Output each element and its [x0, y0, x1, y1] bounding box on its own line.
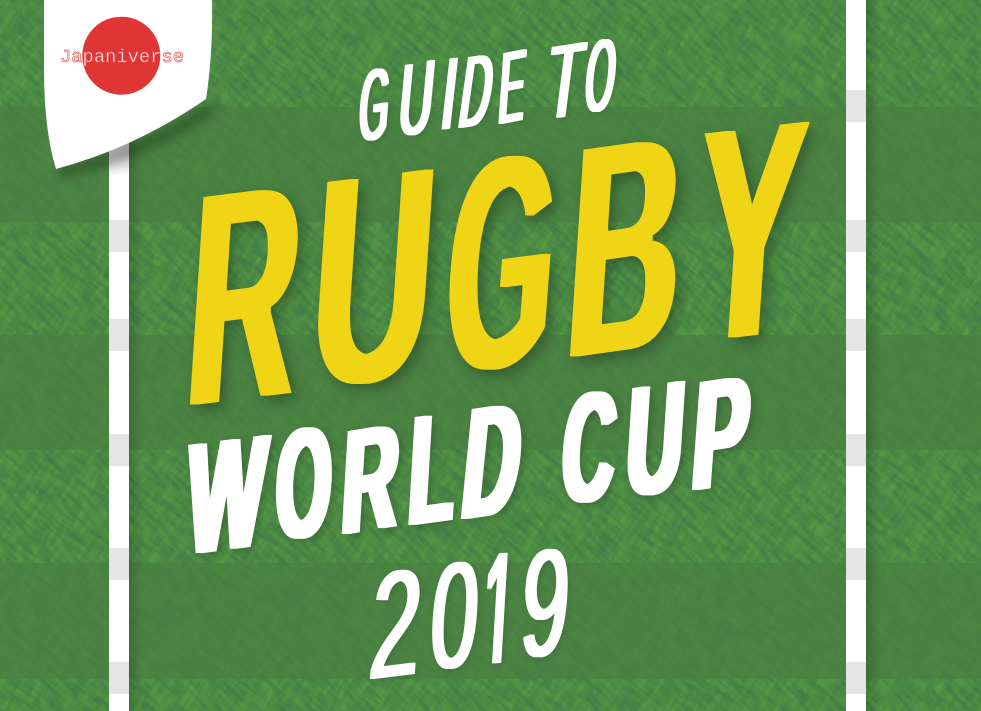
heading line: GUIDE TO: U: [394, 39, 439, 161]
heading line: RUGBY: U: [303, 101, 444, 456]
left touchline: [109, 0, 143, 711]
heading line: RUGBY: B: [559, 66, 692, 426]
heading line: 2019: [370, 548, 570, 680]
heading line: WORLD CUP: D: [456, 367, 529, 554]
heading line: 2019: 0: [425, 529, 484, 704]
heading line: RUGBY: Y: [686, 52, 815, 411]
flag logo: Japaniverse: [44, 0, 212, 172]
heading line: GUIDE TO: G: [356, 46, 393, 165]
heading line: GUIDE TO: I: [436, 36, 463, 153]
heading line: GUIDE TO: E: [496, 26, 529, 147]
heading line: WORLD CUP: L: [405, 379, 460, 560]
heading line: WORLD CUP: [182, 340, 755, 590]
heading line: RUGBY: R: [179, 115, 310, 474]
heading line: RUGBY: [179, 52, 815, 474]
heading line: WORLD CUP: R: [338, 392, 403, 567]
heading line: WORLD CUP: W: [182, 402, 271, 590]
heading line: 2019: 2: [365, 535, 427, 711]
heading line: WORLD CUP: C: [557, 355, 621, 539]
heading line: 2019: 9: [516, 515, 575, 692]
heading line: GUIDE TO: T: [540, 20, 590, 143]
heading line: RUGBY: G: [436, 84, 568, 442]
heading line: WORLD CUP: O: [273, 391, 334, 575]
heading line: GUIDE TO: D: [453, 30, 500, 151]
heading line: WORLD CUP: P: [687, 340, 755, 525]
logo wordmark: Japaniverse: [60, 47, 184, 68]
heading line: WORLD CUP: U: [622, 347, 689, 532]
flag pennant: [44, 0, 212, 169]
right touchline: [846, 0, 880, 711]
heading line: GUIDE TO: [356, 17, 621, 165]
red sun circle: [82, 17, 160, 95]
heading line: GUIDE TO: O: [581, 17, 621, 136]
